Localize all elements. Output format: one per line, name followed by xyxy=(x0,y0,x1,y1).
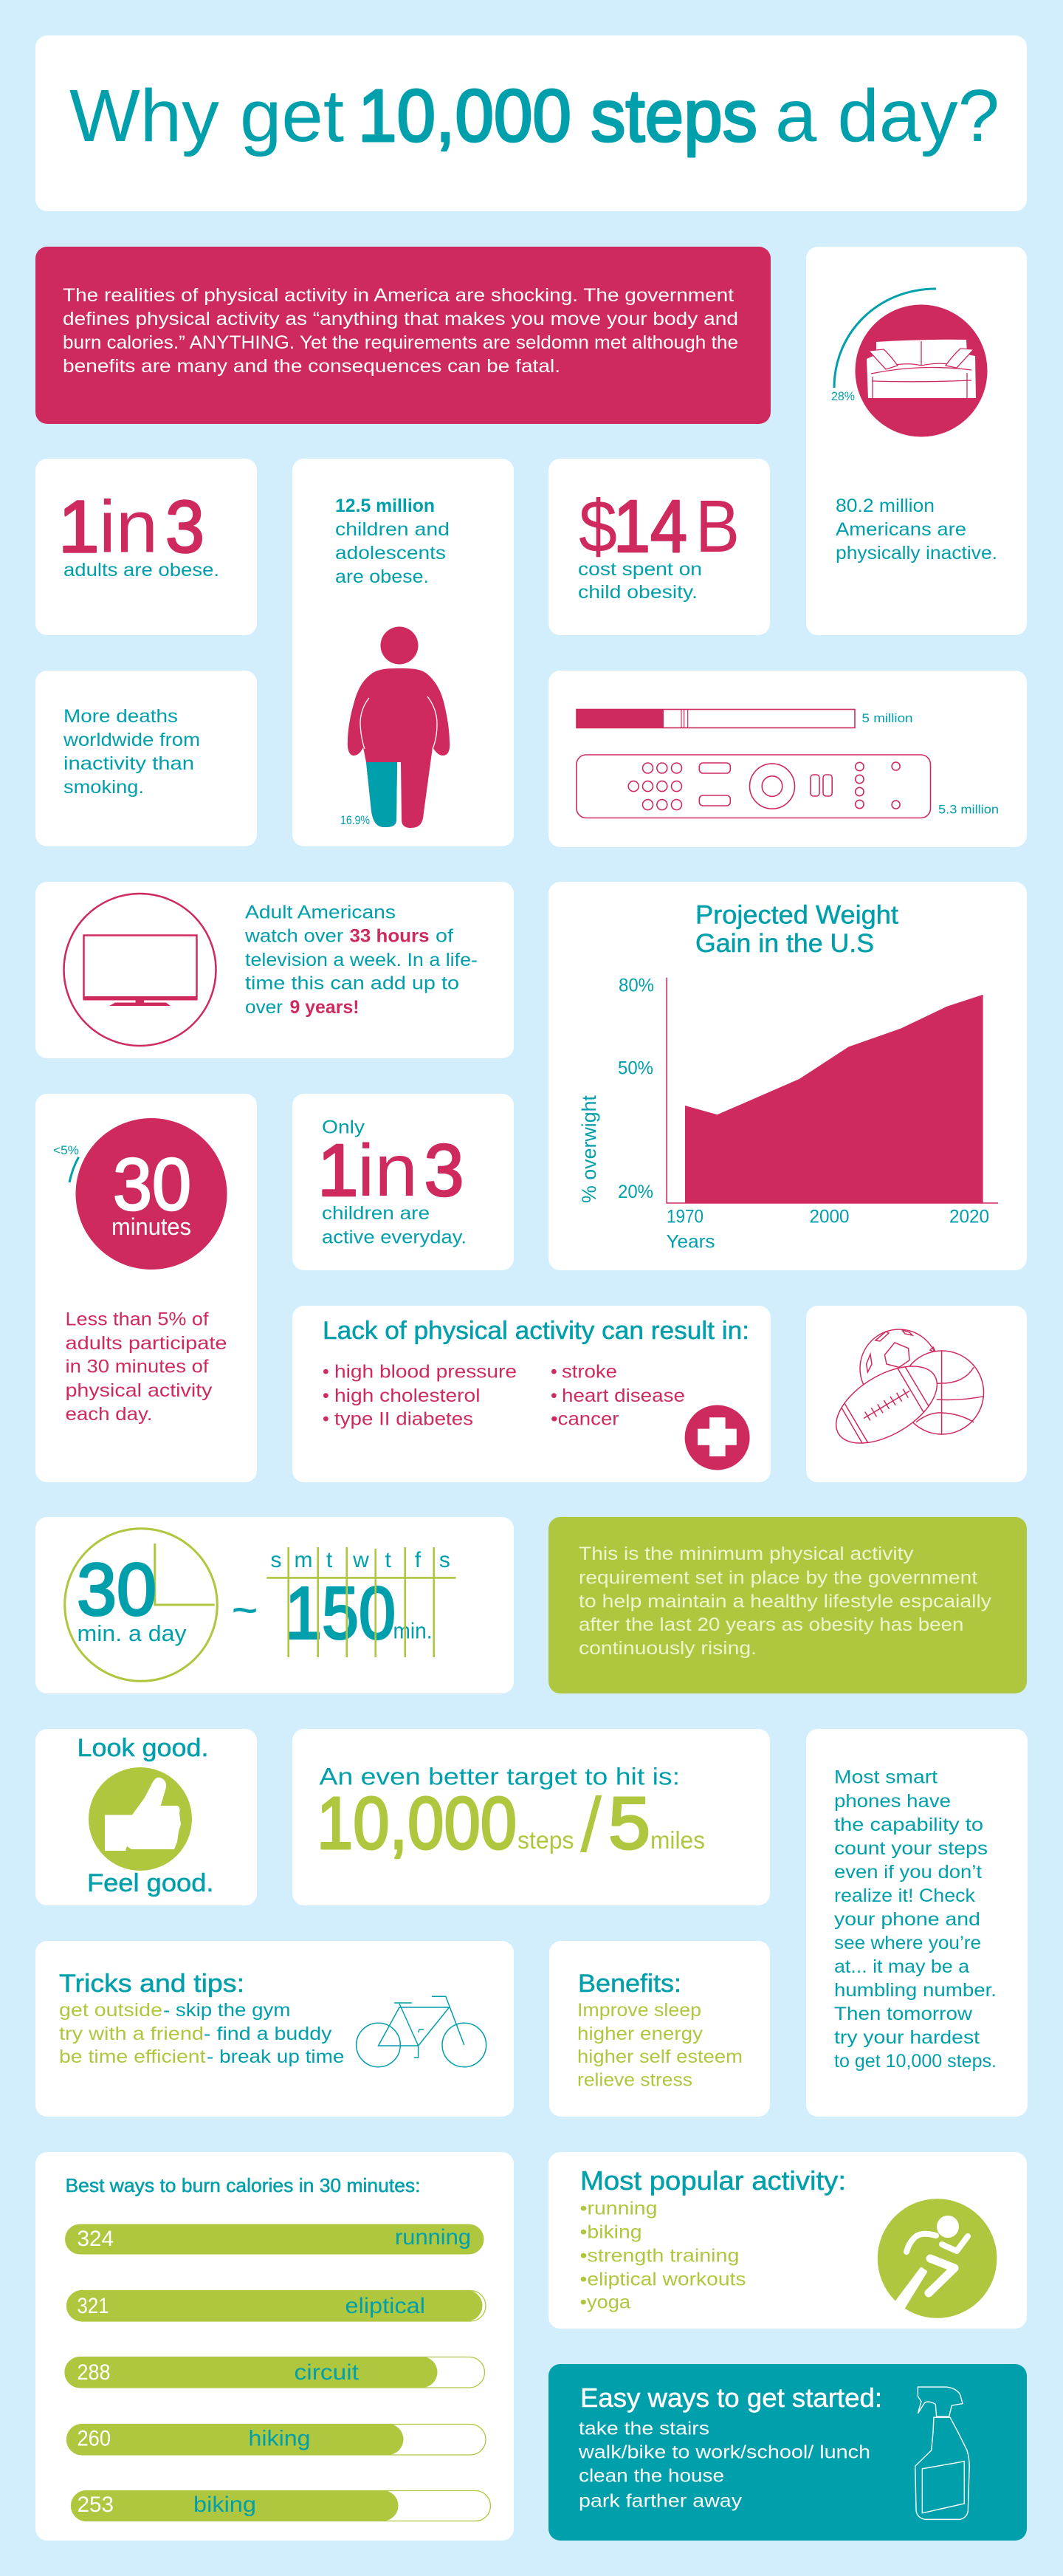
tips list xyxy=(59,2000,344,2067)
stat text: each day. xyxy=(65,1404,152,1425)
stat text: adults participate xyxy=(65,1333,227,1354)
icon: soccer ball, basketball and football xyxy=(823,1329,984,1459)
list: left column: high blood pressure xyxy=(334,1362,517,1383)
stat text xyxy=(65,1309,227,1425)
y axis labels: 50% xyxy=(618,1058,653,1078)
paragraph: Most smart xyxy=(834,1767,938,1787)
stat text: worldwide from xyxy=(63,730,200,750)
icon: cigarette xyxy=(577,709,912,728)
paragraph: at... it may be a xyxy=(834,1956,969,1977)
activities list: •biking xyxy=(580,2222,642,2242)
TV text: 9 years! xyxy=(289,997,359,1018)
title xyxy=(69,75,1000,157)
panel: benefits xyxy=(549,1941,770,2117)
benefits list xyxy=(577,2000,743,2090)
paragraph: Then tomorrow xyxy=(834,2004,973,2024)
big target numbers: steps xyxy=(517,1826,574,1854)
list: left column: high cholesterol xyxy=(334,1385,480,1406)
intro paragraph xyxy=(63,285,738,377)
heading: feel good: Feel good. xyxy=(87,1869,214,1897)
icon: remote control xyxy=(577,755,999,818)
heading: look good: Look good. xyxy=(77,1734,208,1762)
TV text: of xyxy=(436,926,453,947)
icon: week calendar with 150 min: t xyxy=(326,1548,333,1572)
x axis labels: 1970 xyxy=(667,1207,703,1227)
icon: spray bottle xyxy=(915,2387,969,2519)
x axis labels: Years xyxy=(666,1232,715,1253)
heading: Easy ways to get started: xyxy=(580,2383,882,2413)
icon: remote control: 5.3 million xyxy=(938,802,999,817)
icon: runner xyxy=(878,2199,997,2318)
icon: week calendar with 150 min: s xyxy=(270,1548,282,1572)
big stat: 1 in 3: 1 xyxy=(317,1129,359,1212)
panel: television xyxy=(35,882,514,1058)
paragraph: see where you’re xyxy=(834,1933,981,1953)
big stat: $14 B xyxy=(579,485,740,568)
stat text: physically inactive. xyxy=(836,543,997,564)
list: left column: type II diabetes xyxy=(334,1409,473,1430)
icon: week calendar with 150 min: w xyxy=(352,1548,369,1572)
list: right column: • xyxy=(551,1385,557,1406)
icon: clock with 30 min xyxy=(65,1529,217,1681)
icon: sofa in circle with 28% arc xyxy=(831,289,988,437)
panel: most popular activity xyxy=(548,2152,1027,2329)
list: right column xyxy=(551,1362,685,1430)
TV text: 33 hours xyxy=(350,926,430,947)
bar: eliptical: eliptical xyxy=(345,2294,425,2318)
bar: biking: 253 xyxy=(77,2493,114,2517)
suggestions list: park farther away xyxy=(579,2490,743,2511)
big stat: 1 in 3: in xyxy=(99,486,158,569)
panel: better target xyxy=(292,1729,770,1905)
list: right column: heart disease xyxy=(562,1385,685,1406)
bar: biking: biking xyxy=(193,2493,256,2517)
suggestions list: walk/bike to work/school/ lunch xyxy=(578,2442,870,2462)
icon: bicycle xyxy=(357,1996,486,2067)
bar: eliptical: 321 xyxy=(77,2294,109,2318)
activities list: •yoga xyxy=(580,2292,630,2313)
panel: tricks and tips xyxy=(35,1941,514,2117)
list: left column xyxy=(323,1362,517,1430)
paragraph: This is the minimum physical activity xyxy=(579,1544,914,1564)
stat text: More deaths xyxy=(63,706,178,727)
panel: look good feel good xyxy=(35,1729,257,1905)
tilde: ~ xyxy=(232,1592,258,1628)
caption xyxy=(322,1203,467,1248)
Only label: Only xyxy=(322,1117,365,1137)
big target numbers: / xyxy=(580,1782,602,1868)
stat text xyxy=(63,706,200,798)
TV text: time this can add up to xyxy=(245,973,459,994)
paragraph: even if you don’t xyxy=(834,1862,982,1883)
paragraph: count your steps xyxy=(834,1838,988,1859)
icon: week calendar with 150 min: t xyxy=(385,1548,392,1572)
big stat: 1 in 3 xyxy=(58,486,204,569)
caption: cost spent on xyxy=(578,559,702,580)
bar: circuit xyxy=(65,2357,484,2388)
TV text: Adult Americans xyxy=(245,902,396,923)
icon: week calendar with 150 min: s xyxy=(439,1548,450,1572)
chart title xyxy=(695,901,898,958)
stat text: physical activity xyxy=(65,1380,213,1401)
activities list xyxy=(580,2198,746,2313)
bar: running xyxy=(65,2224,484,2254)
stat text: Less than 5% of xyxy=(65,1309,209,1329)
intro paragraph: burn calories.” ANYTHING. Yet the requirements are seldomn met although the xyxy=(63,332,738,353)
list: left column: • xyxy=(323,1409,329,1430)
paragraph: try your hardest xyxy=(834,2027,980,2048)
big stat: 1 in 3: 3 xyxy=(424,1129,464,1212)
paragraph: the capability to xyxy=(834,1815,983,1835)
list: right column: stroke xyxy=(562,1362,617,1383)
caption: adults are obese. xyxy=(63,560,219,580)
list: right column: • xyxy=(551,1362,557,1383)
benefits list: relieve stress xyxy=(577,2069,692,2090)
suggestions list: take the stairs xyxy=(579,2418,709,2439)
paragraph: after the last 20 years as obesity has been xyxy=(579,1614,964,1635)
heading: Best ways to burn calories in 30 minutes: xyxy=(65,2174,421,2196)
stat text: 12.5 million xyxy=(335,496,435,516)
bar: eliptical xyxy=(66,2290,486,2321)
y axis labels: 20% xyxy=(618,1182,653,1202)
heading: Benefits: xyxy=(578,1970,681,1998)
icon: obese figure with 16.9% highlighted xyxy=(340,626,450,828)
big stat: $14 B: 14 xyxy=(613,485,687,568)
tips list: - find a buddy xyxy=(204,2024,332,2044)
chart title: Projected Weight xyxy=(695,901,898,929)
y axis labels xyxy=(578,975,654,1203)
activities list: •running xyxy=(580,2198,657,2219)
tips list: be time efficient xyxy=(59,2046,206,2067)
stat text xyxy=(335,496,450,587)
stat text: adolescents xyxy=(335,543,446,564)
icon: week calendar with 150 min: m xyxy=(294,1548,313,1572)
big target numbers: miles xyxy=(650,1826,705,1854)
TV text: television a week. In a life- xyxy=(245,950,478,970)
bar: running: 324 xyxy=(77,2227,114,2251)
bar: circuit: 288 xyxy=(77,2360,111,2385)
tips list: - skip the gym xyxy=(163,2000,291,2021)
intro paragraph: defines physical activity as “anything that makes you move your body and xyxy=(63,309,738,329)
title: a day? xyxy=(775,75,1000,157)
icon: 30 minutes circle xyxy=(53,1118,227,1270)
stat text: in 30 minutes of xyxy=(65,1356,209,1377)
caption: active everyday. xyxy=(322,1227,467,1248)
TV text: watch over xyxy=(244,926,343,947)
suggestions list xyxy=(578,2418,870,2511)
icon: sofa in circle with 28% arc: 28% xyxy=(831,389,855,403)
panel: sports balls xyxy=(806,1306,1027,1482)
paragraph: continuously rising. xyxy=(579,1638,757,1659)
caption: child obesity. xyxy=(578,582,698,603)
title: 10,000 steps xyxy=(358,75,757,157)
big stat: 1 in 3 xyxy=(317,1129,464,1212)
paragraph: your phone and xyxy=(834,1909,980,1930)
panel: 30 minutes adults xyxy=(35,1094,257,1482)
chart title: Gain in the U.S xyxy=(695,929,874,958)
big target numbers: 10,000 xyxy=(317,1782,517,1865)
icon: week calendar with 150 min: 150 xyxy=(285,1572,396,1654)
paragraph: to get 10,000 steps. xyxy=(834,2051,997,2072)
x axis labels: 2020 xyxy=(949,1207,989,1227)
TV text xyxy=(244,902,478,1018)
paragraph: to help maintain a healthy lifestyle espcaially xyxy=(579,1591,992,1611)
big target numbers: 5 xyxy=(608,1782,650,1865)
y axis labels: % overwight xyxy=(578,1095,600,1203)
title: Why get xyxy=(69,75,344,157)
icon: obese figure with 16.9% highlighted: 16.9% xyxy=(340,813,370,827)
caption: children are xyxy=(322,1203,430,1224)
benefits list: Improve sleep xyxy=(577,2000,701,2021)
panel: intro text xyxy=(35,247,771,424)
big stat: $14 B: B xyxy=(695,485,740,568)
panel: best ways to burn calories xyxy=(35,2152,514,2541)
title panel xyxy=(35,35,1027,211)
intro paragraph: benefits are many and the consequences can be fatal. xyxy=(63,356,560,377)
panel: children obese xyxy=(292,459,514,846)
panel: children active xyxy=(292,1094,514,1270)
paragraph xyxy=(834,1767,997,2072)
bar: hiking: 260 xyxy=(77,2427,111,2450)
icon: TV in circle xyxy=(63,894,216,1046)
caption xyxy=(578,559,702,603)
stat text: inactivity than xyxy=(63,753,194,774)
icon: 30 minutes circle: 30 xyxy=(113,1143,191,1226)
area chart xyxy=(667,978,998,1203)
icon: week calendar with 150 min: f xyxy=(415,1548,422,1572)
panel: cigarette vs remote xyxy=(548,671,1027,847)
icon: clock with 30 min: min. a day xyxy=(77,1620,187,1646)
panel: smart phones xyxy=(806,1729,1028,2117)
tips list: - break up time xyxy=(207,2046,344,2067)
tips list: try with a friend xyxy=(59,2024,204,2044)
icon: 30 minutes circle: minutes xyxy=(111,1213,191,1240)
panel: minimum requirement text xyxy=(548,1517,1027,1693)
activities list: •eliptical workouts xyxy=(580,2269,746,2289)
icon: week calendar with 150 min xyxy=(266,1547,456,1657)
big target numbers xyxy=(317,1782,705,1868)
paragraph: phones have xyxy=(834,1791,951,1812)
panel: child obesity cost xyxy=(548,459,770,635)
panel: inactive Americans xyxy=(806,247,1027,635)
paragraph xyxy=(579,1544,992,1659)
TV text: over xyxy=(245,997,283,1018)
lead text: An even better target to hit is: xyxy=(319,1764,680,1790)
bar: biking xyxy=(71,2490,490,2521)
benefits list: higher energy xyxy=(577,2024,703,2044)
stat text: Americans are xyxy=(836,519,966,540)
bar: hiking xyxy=(66,2424,486,2455)
bar: running: running xyxy=(395,2225,471,2250)
big stat: $14 B: $ xyxy=(579,485,617,568)
stat text: 80.2 million xyxy=(836,496,935,516)
bar: hiking: hiking xyxy=(248,2427,310,2450)
x axis labels xyxy=(666,1207,989,1253)
x axis labels: 2000 xyxy=(809,1207,849,1227)
icon: 30 minutes circle: <5% xyxy=(53,1143,79,1157)
stat text: children and xyxy=(335,519,450,540)
list: left column: • xyxy=(323,1362,329,1383)
benefits list: higher self esteem xyxy=(577,2046,743,2067)
stat text: are obese. xyxy=(335,566,429,587)
intro paragraph: The realities of physical activity in America are shocking. The government xyxy=(63,285,734,306)
icon: thumbs up xyxy=(89,1767,192,1871)
heading: Lack of physical activity can result in: xyxy=(323,1317,749,1345)
paragraph: requirement set in place by the government xyxy=(579,1567,977,1588)
bar: circuit: circuit xyxy=(294,2360,360,2385)
icon: cigarette: 5 million xyxy=(862,711,912,725)
big stat: 1 in 3: 3 xyxy=(165,486,204,569)
icon: clock with 30 min: 30 xyxy=(77,1548,156,1631)
panel: adults obese xyxy=(35,459,257,635)
suggestions list: clean the house xyxy=(579,2465,724,2486)
icon: week calendar with 150 min: min. xyxy=(393,1617,433,1644)
stat text: smoking. xyxy=(63,777,144,798)
paragraph: realize it! Check xyxy=(834,1885,976,1906)
heading: Most popular activity: xyxy=(580,2165,846,2196)
panel: 30 min a day equals 150 min a week xyxy=(35,1517,514,1693)
tips list: get outside xyxy=(59,2000,162,2021)
icon: medical cross xyxy=(685,1405,750,1470)
big stat: 1 in 3: in xyxy=(357,1129,418,1212)
heading: Tricks and tips: xyxy=(59,1970,244,1998)
activities list: •strength training xyxy=(580,2245,740,2266)
stat text xyxy=(836,496,997,564)
list: right column: •cancer xyxy=(551,1409,619,1430)
panel: easy ways to get started xyxy=(548,2364,1027,2541)
paragraph: humbling number. xyxy=(834,1980,997,2001)
y axis labels: 80% xyxy=(619,975,654,996)
big stat: 1 in 3: 1 xyxy=(58,486,100,569)
panel: deaths from inactivity xyxy=(35,671,257,846)
panel: projected weight gain chart xyxy=(548,882,1027,1270)
list: left column: • xyxy=(323,1385,329,1406)
panel: consequences of inactivity xyxy=(292,1306,771,1482)
